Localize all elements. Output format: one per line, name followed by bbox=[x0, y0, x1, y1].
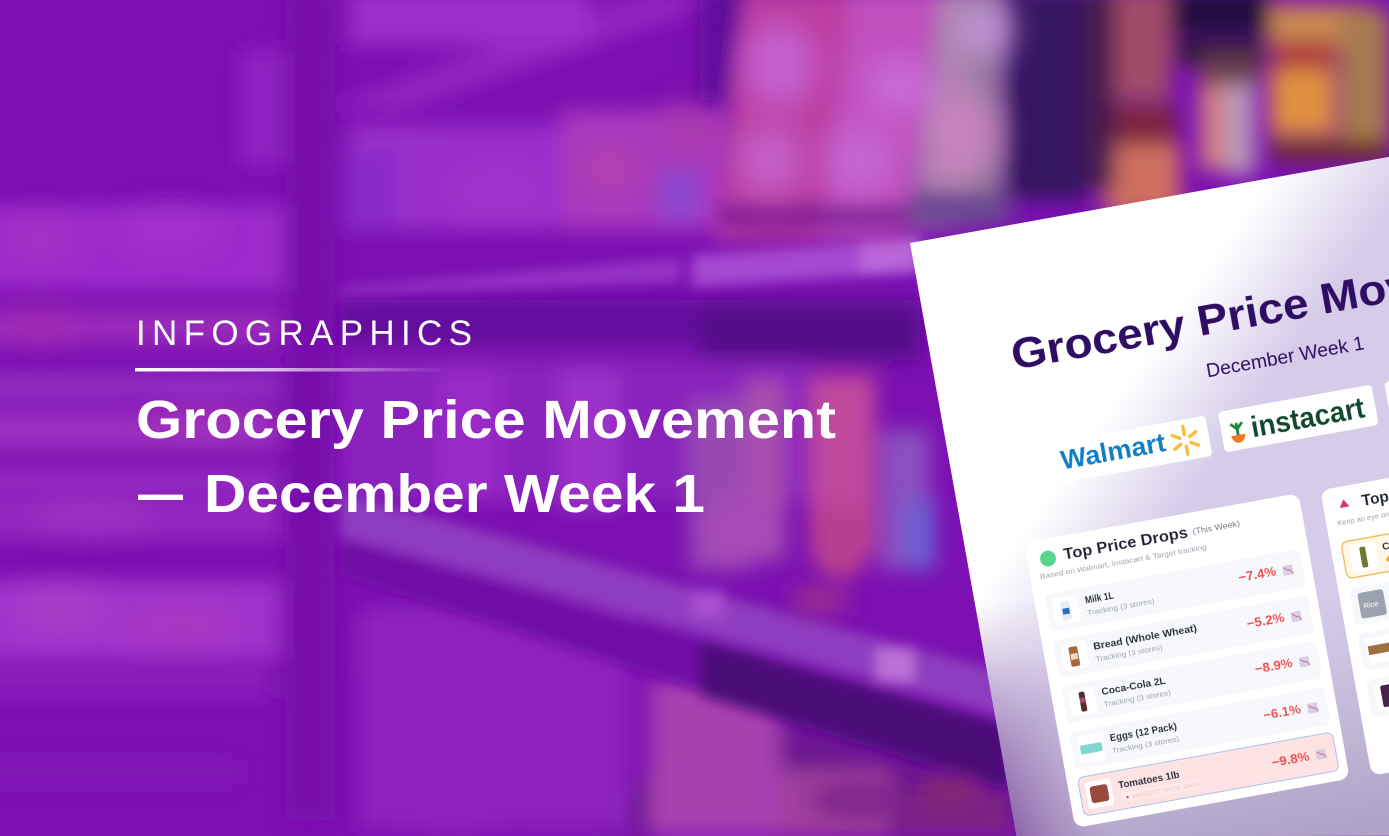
icon: red triangle bbox=[1338, 498, 1350, 508]
row: bread: Tracking (3 stores) bbox=[1095, 643, 1164, 664]
row: coca-cola: −8.9% bbox=[1254, 655, 1294, 677]
row: milk: −7.4% bbox=[1237, 563, 1278, 585]
panel: top price rises bbox=[1320, 441, 1389, 776]
row: eggs: Tracking (3 stores) bbox=[1111, 734, 1180, 755]
logo: Walmart: Walmart bbox=[1058, 427, 1168, 475]
row: bread bbox=[1053, 595, 1314, 678]
row: rice bbox=[1349, 543, 1389, 626]
row: tomatoes (biggest drop): −9.8% bbox=[1270, 748, 1311, 770]
logo: third store box bbox=[1384, 355, 1389, 423]
row: tomatoes (biggest drop): BIGGEST PRICE DROP bbox=[1132, 782, 1202, 800]
icon: green dot bbox=[1039, 549, 1057, 568]
row: coca-cola bbox=[1061, 640, 1323, 724]
headline: — bbox=[138, 464, 183, 524]
headline bbox=[136, 390, 836, 524]
heading note: (This Week) bbox=[1192, 519, 1241, 536]
row: bread: −5.2% bbox=[1245, 610, 1286, 631]
kicker label: INFOGRAPHICS bbox=[136, 314, 472, 353]
row: milk bbox=[1044, 549, 1306, 632]
headline: December Week 1 bbox=[204, 464, 705, 524]
row: coca-cola: Tracking (3 stores) bbox=[1103, 688, 1172, 709]
logo: Instacart: instacart bbox=[1248, 391, 1367, 444]
logo: Instacart bbox=[1218, 385, 1379, 453]
panel heading: Top Price Drops bbox=[1062, 525, 1189, 564]
row: eggs: −6.1% bbox=[1262, 701, 1302, 723]
logo: Walmart bbox=[1053, 415, 1212, 483]
row: milk: Milk 1L bbox=[1084, 591, 1115, 607]
row: tomatoes (biggest drop): Tomatoes 1lb bbox=[1118, 770, 1180, 792]
row: dark item bbox=[1366, 634, 1389, 718]
mottling left and middle bbox=[0, 102, 718, 825]
row: milk: Tracking (3 stores) bbox=[1087, 596, 1156, 617]
divider rule under kicker bbox=[135, 368, 450, 372]
row: rice: Rice bbox=[1363, 599, 1379, 610]
row: eggs: Eggs (12 Pack) bbox=[1109, 721, 1178, 744]
card background bbox=[910, 108, 1389, 836]
row: eggs bbox=[1069, 687, 1331, 770]
tilted infographic preview card bbox=[910, 108, 1389, 836]
card subtitle: December Week 1 bbox=[1205, 333, 1366, 382]
panel subtitle: Based on Walmart, Instacart & Target tracking bbox=[1039, 542, 1207, 581]
row: tomatoes (biggest drop) bbox=[1077, 732, 1339, 816]
upper right product packs bbox=[700, 0, 1389, 240]
row: highlighted bottle bbox=[1341, 497, 1389, 579]
row: bread strip item bbox=[1357, 588, 1389, 671]
row: bread: Bread (Whole Wheat) bbox=[1093, 623, 1198, 653]
headline: Grocery Price Movement bbox=[136, 390, 836, 450]
panel: top price drops bbox=[1024, 493, 1350, 828]
row: coca-cola: Coca-Cola 2L bbox=[1101, 676, 1167, 698]
